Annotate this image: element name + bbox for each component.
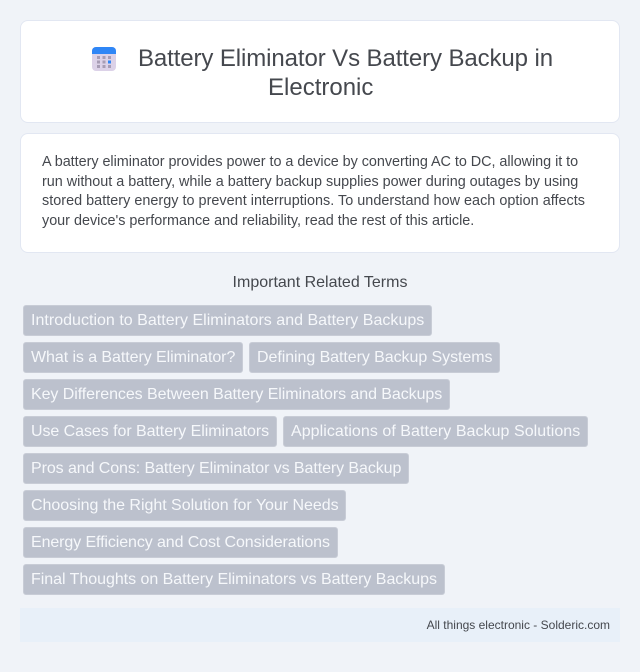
- intro paragraph: A battery eliminator provides power to a device by converting AC to DC, allowing it to: [42, 154, 578, 170]
- footer: [20, 608, 620, 642]
- tag: Pros and Cons: Battery Eliminator vs Battery Backup: [31, 460, 401, 477]
- tag: Introduction to Battery Eliminators and Battery Backups: [31, 312, 424, 329]
- tag: Final Thoughts on Battery Eliminators vs Battery Backups: [31, 571, 437, 588]
- tag: Key Differences Between Battery Eliminators and Backups: [31, 386, 442, 403]
- tag: [23, 527, 338, 558]
- tag: [23, 379, 450, 410]
- footer credit: All things electronic - Solderic.com: [427, 618, 610, 632]
- tag: [23, 453, 409, 484]
- header panel: [20, 20, 620, 123]
- title: Electronic: [268, 74, 373, 101]
- tag list: [23, 305, 588, 595]
- tag: [23, 416, 277, 447]
- tag: [23, 490, 346, 521]
- intro paragraph: stored battery energy to prevent interruptions. To understand how each option affects: [42, 193, 585, 209]
- tag: [283, 416, 588, 447]
- tag: What is a Battery Eliminator?: [31, 349, 235, 366]
- tag: Use Cases for Battery Eliminators: [31, 423, 269, 440]
- icon: calendar: [92, 47, 116, 71]
- tag: Choosing the Right Solution for Your Needs: [31, 497, 339, 514]
- tag: [249, 342, 500, 373]
- intro paragraph: run without a battery, while a battery backup supplies power during outages by using: [42, 174, 578, 190]
- title: Battery Eliminator Vs Battery Backup in: [138, 45, 553, 72]
- tag: Defining Battery Backup Systems: [257, 349, 492, 366]
- intro paragraph: [42, 154, 585, 229]
- tag: [23, 305, 432, 336]
- intro paragraph: your device's performance and reliability, read the rest of this article.: [42, 213, 474, 229]
- intro text panel: [20, 133, 620, 253]
- tag: [23, 342, 243, 373]
- tag: Energy Efficiency and Cost Considerations: [31, 534, 330, 551]
- tag: [23, 564, 445, 595]
- tag: Applications of Battery Backup Solutions: [291, 423, 580, 440]
- section heading: Important Related Terms: [233, 274, 407, 291]
- title: [138, 45, 553, 101]
